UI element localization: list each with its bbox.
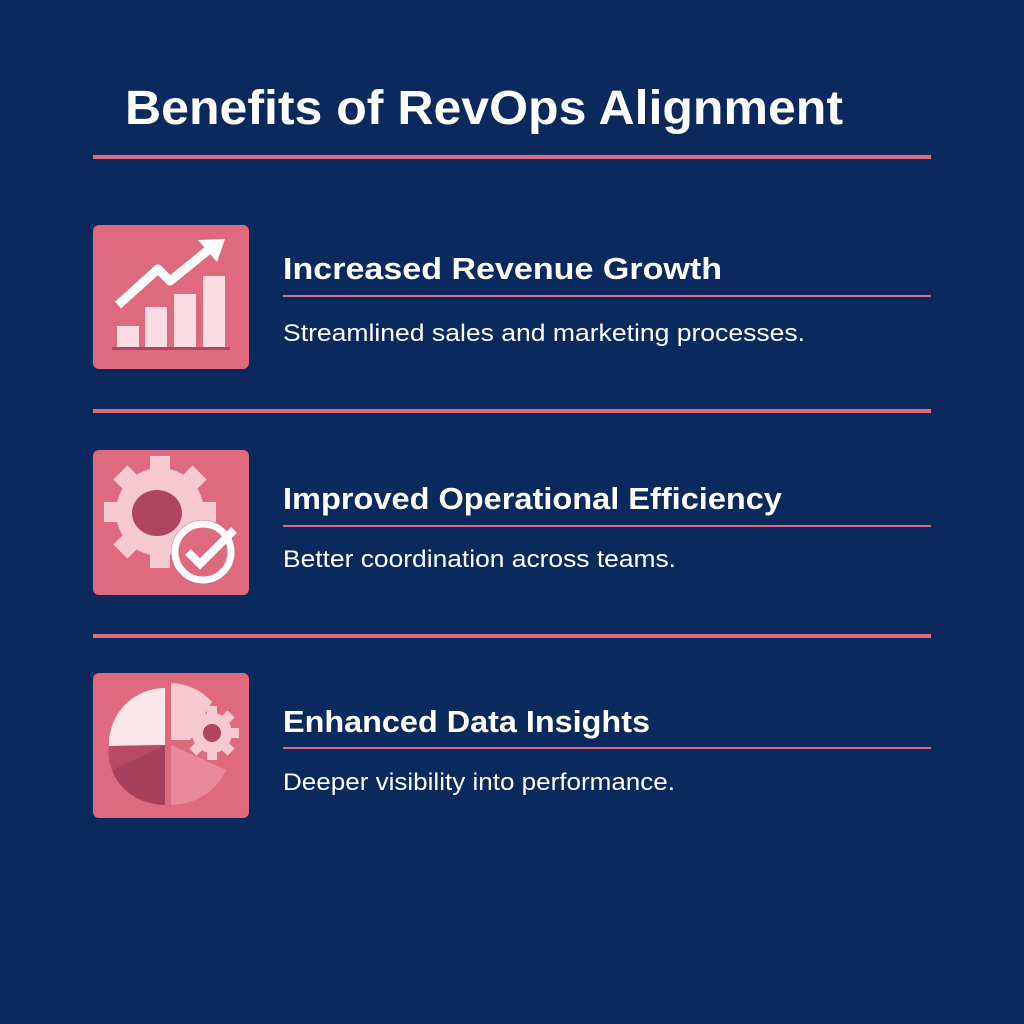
heading: Improved Operational Efficiency [283, 481, 783, 516]
description: Better coordination across teams. [283, 546, 676, 573]
icon: gear with check [93, 450, 249, 595]
icon: pie chart with gear [93, 673, 249, 818]
item 1: revenue growth [93, 225, 931, 369]
icon: bar chart with arrow [93, 225, 249, 369]
item 3: data insights [93, 673, 931, 818]
heading: Increased Revenue Growth [283, 251, 722, 286]
title: Benefits of RevOps Alignment [125, 82, 843, 135]
heading: Enhanced Data Insights [283, 704, 650, 739]
description: Streamlined sales and marketing processes. [283, 320, 805, 347]
description: Deeper visibility into performance. [283, 769, 675, 796]
item 2: operational efficiency [93, 450, 931, 595]
